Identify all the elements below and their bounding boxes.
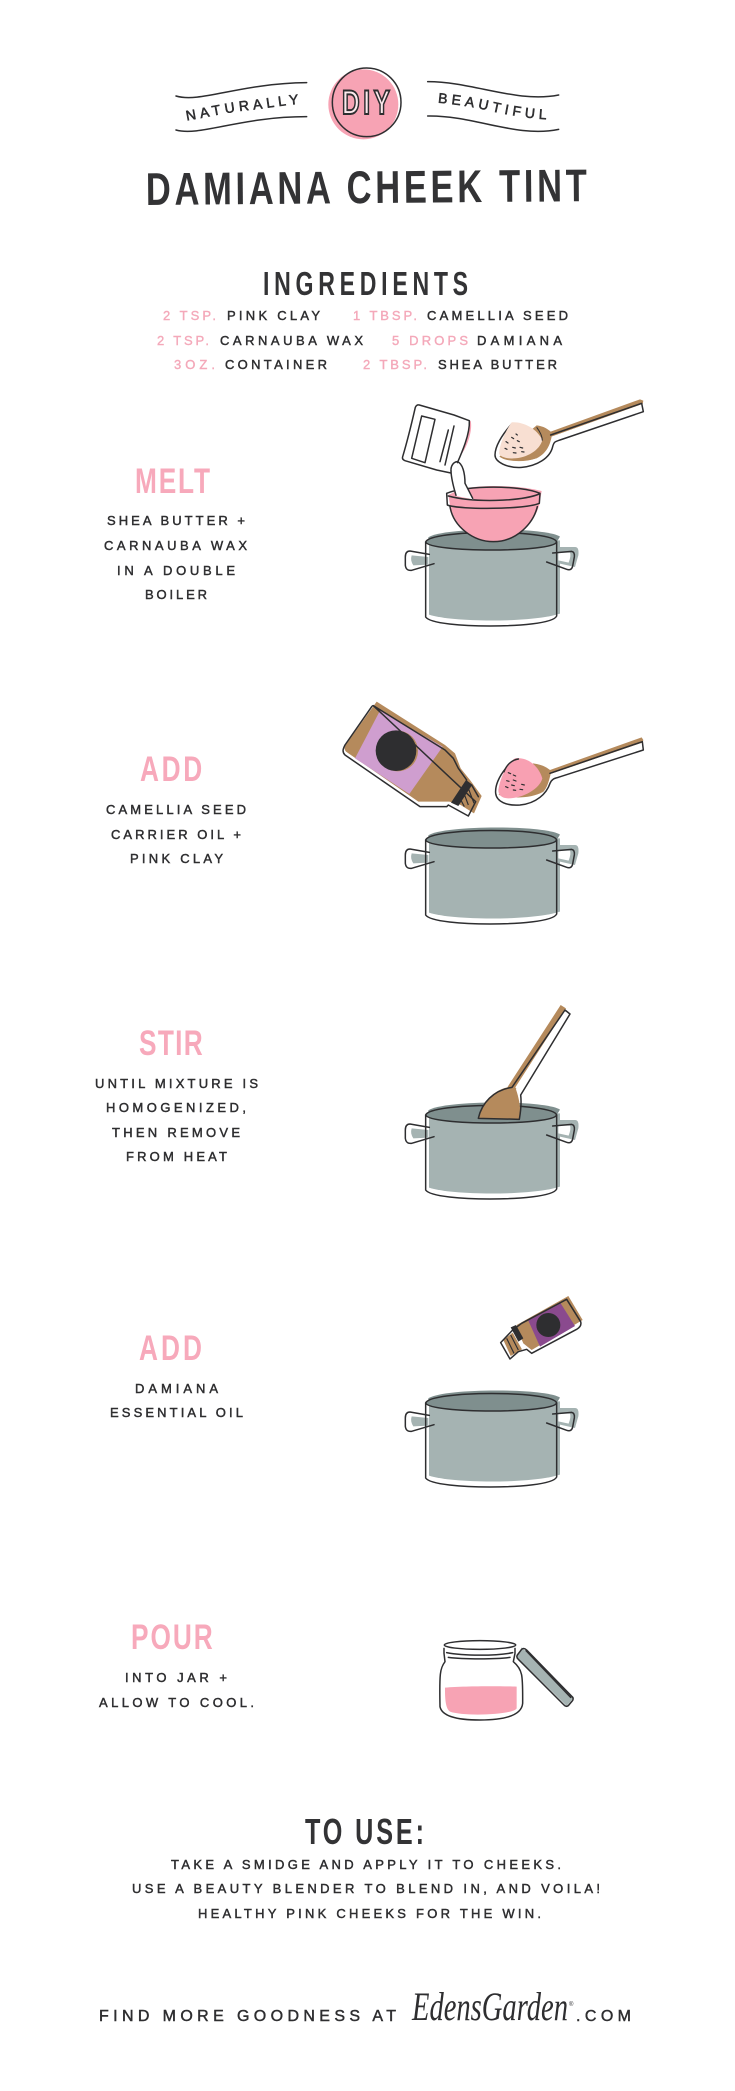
step 5 text bbox=[99, 1670, 254, 1710]
step 1 heading: melt: MELT bbox=[135, 461, 210, 501]
heading: ingredients: INGREDIENTS bbox=[263, 266, 468, 303]
step 4 text: ESSENTIAL OIL bbox=[110, 1405, 243, 1420]
footer: ® bbox=[569, 2001, 574, 2008]
ingredients list: CARNAUBA WAX bbox=[220, 333, 363, 348]
ingredients list: SHEA BUTTER bbox=[438, 357, 557, 372]
badge: naturally beautiful DIY: NATURALLY bbox=[186, 94, 298, 121]
step 3 text bbox=[95, 1076, 258, 1164]
footer bbox=[99, 1984, 631, 2029]
step 1 icon: bowl, clay pouch, spoon with shea butter bbox=[402, 399, 643, 542]
ingredients list: CONTAINER bbox=[225, 357, 327, 372]
step 1 pot bbox=[405, 529, 579, 626]
title: DAMIANA CHEEK TINT bbox=[146, 159, 587, 215]
heading: to use: TO USE: bbox=[305, 1812, 424, 1852]
pink back of pouch bbox=[455, 421, 471, 461]
step 1 text: SHEA BUTTER + bbox=[107, 513, 245, 528]
step 2 pot bbox=[405, 827, 579, 924]
badge: naturally beautiful DIY: DIY bbox=[342, 84, 390, 122]
step 1 text: CARNAUBA WAX bbox=[104, 538, 247, 553]
ingredients list: CAMELLIA SEED bbox=[427, 308, 568, 323]
footer: FIND MORE GOODNESS AT bbox=[99, 2008, 396, 2025]
step 3 text: THEN REMOVE bbox=[112, 1125, 240, 1140]
poured powder bbox=[451, 462, 473, 499]
bowl bbox=[448, 486, 542, 542]
step 2 icon: carrier oil bottle bbox=[343, 702, 482, 816]
ingredients list: 1 TBSP. bbox=[353, 308, 417, 323]
ingredients list bbox=[157, 308, 568, 372]
ingredients list: 5 DROPS bbox=[392, 333, 468, 348]
to use text: TAKE A SMIDGE AND APPLY IT TO CHEEKS. bbox=[171, 1857, 561, 1872]
ingredients list: PINK CLAY bbox=[227, 308, 320, 323]
step 1 text: IN A DOUBLE bbox=[117, 563, 235, 578]
step 4 pot bbox=[405, 1390, 579, 1487]
step 2 text: PINK CLAY bbox=[130, 851, 223, 866]
step 2 text: CARRIER OIL + bbox=[111, 827, 241, 842]
step 1 text bbox=[104, 513, 247, 602]
ingredients list: 2 TSP. bbox=[157, 333, 209, 348]
step 2 text: CAMELLIA SEED bbox=[106, 802, 246, 817]
badge: naturally beautiful DIY: BEAUTIFUL bbox=[438, 92, 546, 120]
ingredients list: 3OZ. bbox=[174, 357, 215, 372]
footer: EdensGarden bbox=[411, 1984, 568, 2029]
clay pouch bbox=[402, 405, 469, 473]
ingredients list: 2 TBSP. bbox=[363, 357, 427, 372]
ingredients list: 2 TSP. bbox=[163, 308, 216, 323]
step 5 text: ALLOW TO COOL. bbox=[99, 1695, 254, 1710]
step 3 text: FROM HEAT bbox=[126, 1149, 227, 1164]
step 4 icon: essential oil bottle bbox=[501, 1296, 583, 1359]
step 4 heading: add: ADD bbox=[139, 1328, 202, 1368]
spoon bbox=[499, 399, 643, 462]
step 1 text: BOILER bbox=[145, 587, 207, 602]
step 3 icon: wooden spoon in pot bbox=[478, 1005, 570, 1119]
to use text bbox=[132, 1857, 600, 1921]
to use text: HEALTHY PINK CHEEKS FOR THE WIN. bbox=[198, 1906, 541, 1921]
step 2 heading: add: ADD bbox=[140, 749, 202, 789]
step 2 text bbox=[106, 802, 246, 866]
step 2 icon: spoon with pink clay bbox=[496, 737, 643, 805]
step 4 text bbox=[110, 1381, 243, 1420]
step 5 icon: jar and lid bbox=[440, 1641, 574, 1720]
footer: .COM bbox=[576, 2008, 631, 2025]
step 5 text: INTO JAR + bbox=[125, 1670, 227, 1685]
step 3 heading: stir: STIR bbox=[139, 1023, 203, 1063]
step 3 text: UNTIL MIXTURE IS bbox=[95, 1076, 258, 1091]
step 5 heading: pour: POUR bbox=[131, 1617, 213, 1657]
badge: naturally beautiful DIY bbox=[175, 67, 560, 140]
to use text: USE A BEAUTY BLENDER TO BLEND IN, AND VOILA! bbox=[132, 1881, 600, 1896]
step 3 pot bbox=[405, 1102, 579, 1199]
ingredients list: DAMIANA bbox=[477, 333, 562, 348]
step 3 text: HOMOGENIZED, bbox=[106, 1100, 246, 1115]
step 4 text: DAMIANA bbox=[135, 1381, 218, 1396]
